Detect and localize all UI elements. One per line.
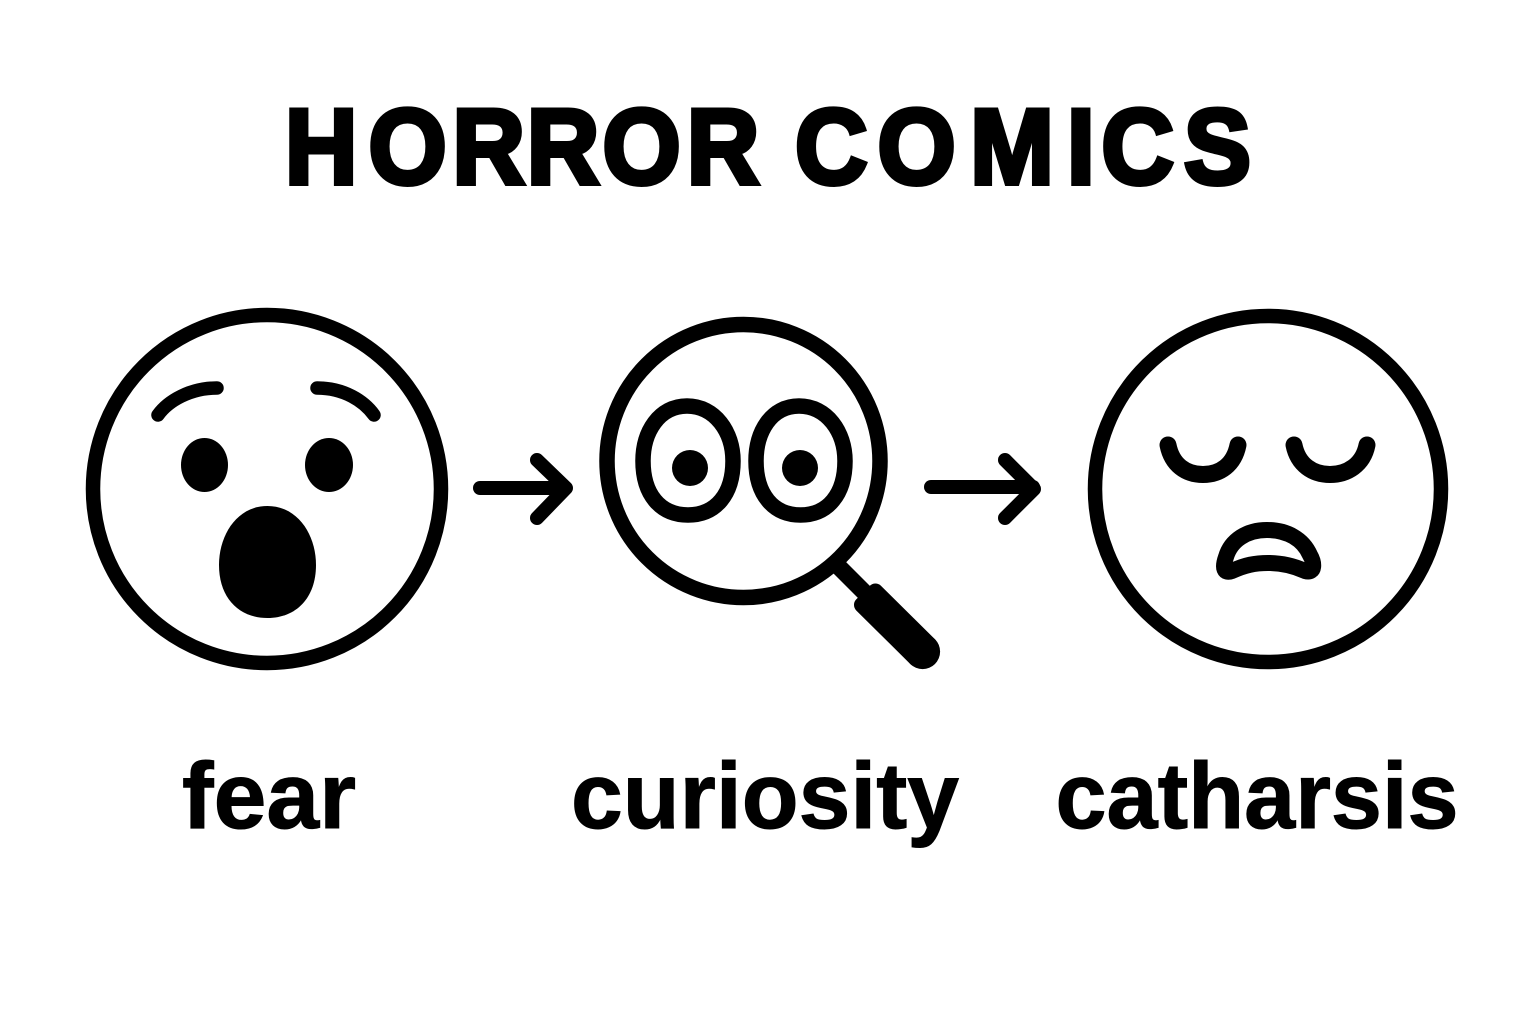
icon: curiosity magnifying glass bbox=[607, 324, 940, 669]
label: curiosity: curiosity bbox=[571, 743, 959, 848]
icon: catharsis face bbox=[1095, 316, 1441, 662]
arrow: curiosity to catharsis bbox=[931, 460, 1034, 518]
label: fear: fear bbox=[182, 743, 356, 848]
title: HORROR COMICS bbox=[285, 88, 1251, 207]
label: catharsis: catharsis bbox=[1056, 743, 1458, 848]
icon: fear face bbox=[93, 315, 441, 663]
arrow: fear to curiosity bbox=[480, 460, 566, 518]
